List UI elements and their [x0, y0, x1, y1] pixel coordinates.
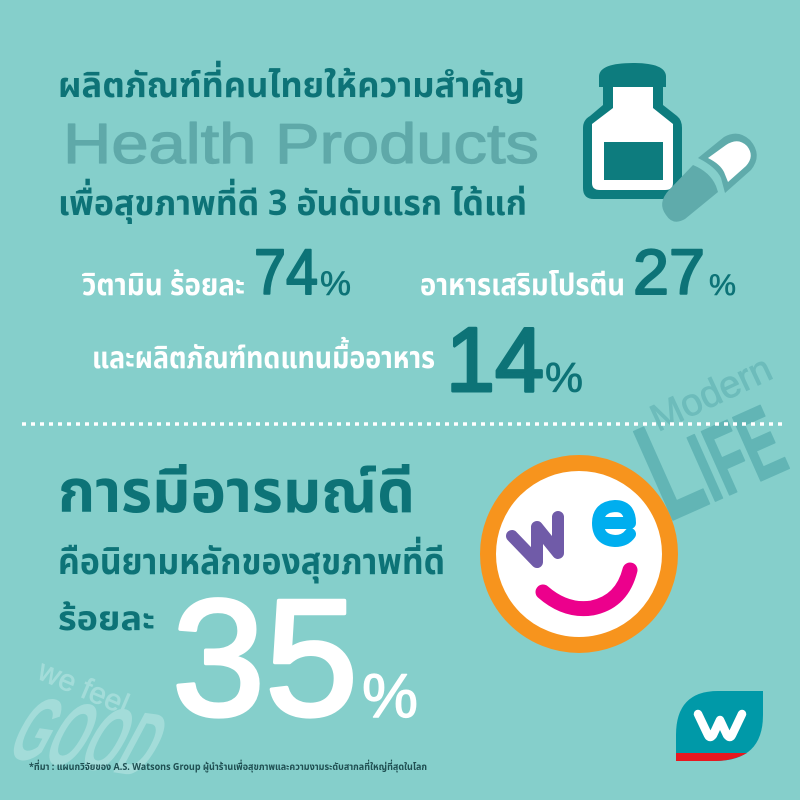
watermark: Modern Life: Modern — [644, 348, 779, 440]
stat: vitamins 74%: 74 — [254, 236, 318, 308]
stat: 35% — [58, 566, 418, 751]
stat: protein supplements 27%: 27 — [633, 236, 705, 308]
icon: we smiley face — [488, 463, 670, 645]
stat: meal replacements 14%: % — [545, 354, 583, 401]
stat: protein supplements 27%: อาหารเสริมโปรตีน — [420, 263, 625, 309]
stat: protein supplements 27% — [420, 236, 736, 309]
stat: protein supplements 27%: % — [709, 269, 736, 302]
logo: Watsons w — [676, 691, 763, 761]
heading line 1: ผลิตภัณฑ์ที่คนไทยให้ความสำคัญ — [58, 60, 525, 113]
watermark: we feel good: we feel — [32, 654, 134, 722]
footnote: *ที่มา : แผนกวิจัยของ A.S. Watsons Group ผู้นำร้านเพื่อสุขภาพและความงามระดับสากลที่ใหญ่ที่สุดในโลก — [29, 759, 427, 775]
stat: vitamins 74%: % — [320, 265, 351, 303]
stat: meal replacements 14%: และผลิตภัณฑ์ทดแทนมื้ออาหาร — [92, 336, 435, 382]
icon: medicine bottle and capsule — [583, 63, 757, 222]
stat: 35%: ร้อยละ — [58, 595, 155, 646]
watermark: Modern Life: LIFE — [617, 352, 800, 550]
text: main definition of good health: คือนิยามหลักของสุขภาพที่ดี — [58, 536, 445, 591]
stat: meal replacements 14%: 14 — [446, 310, 544, 411]
stat: 35%: 35 — [172, 566, 358, 751]
stat: vitamins 74%: วิตามิน ร้อยละ — [81, 263, 245, 309]
heading: Health Products: Health Products — [63, 112, 539, 176]
stat: meal replacements 14% — [92, 310, 583, 411]
stat: 35%: % — [362, 662, 418, 731]
stat: vitamins 74% — [81, 236, 351, 309]
heading: good mood: การมีอารมณ์ดี — [58, 448, 415, 539]
heading line 3: เพื่อสุขภาพที่ดี 3 อันดับแรก ได้แก่ — [58, 178, 527, 231]
